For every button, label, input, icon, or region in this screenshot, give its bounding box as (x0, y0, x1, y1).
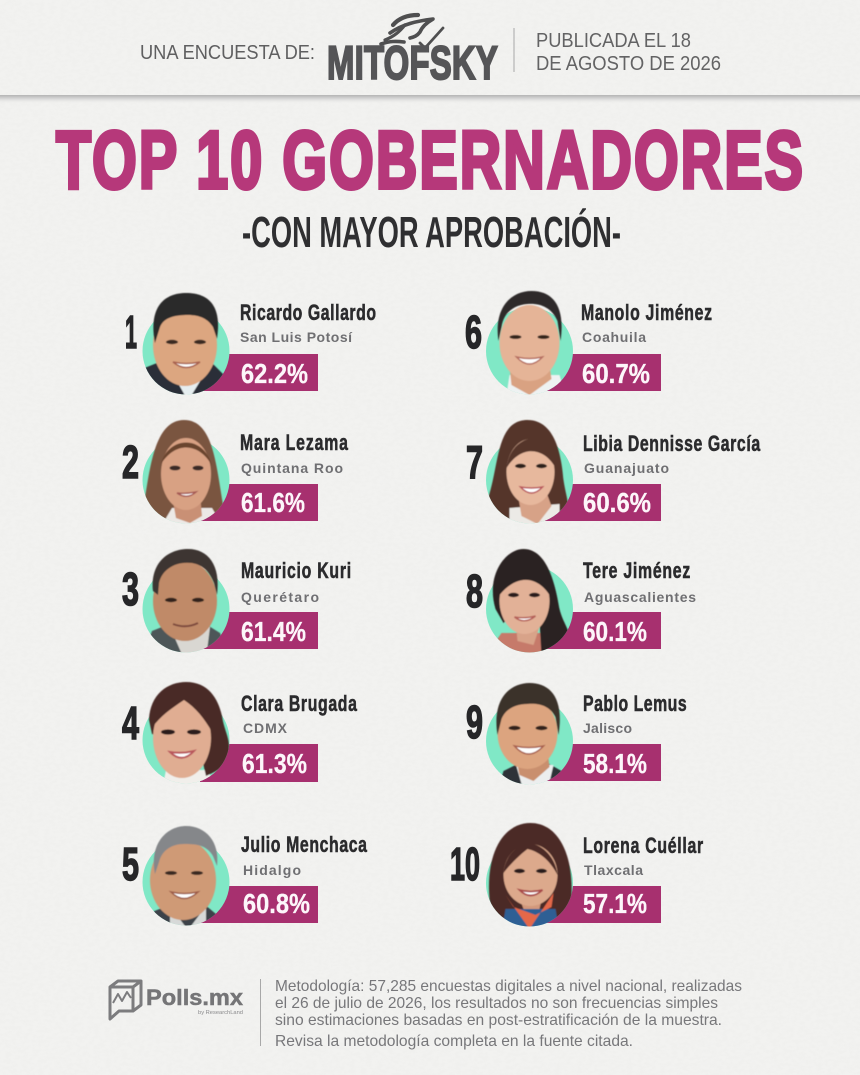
entry 9 (466, 683, 687, 791)
name: Pablo Lemus (583, 693, 687, 717)
approval: 62.2% (241, 358, 308, 389)
approval: 61.6% (241, 487, 305, 518)
icon: Mitofsky bird logo (381, 15, 443, 48)
rank: 2 (122, 436, 139, 488)
approval: 61.4% (241, 616, 306, 647)
approval: 60.7% (582, 358, 650, 389)
publication date: PUBLICADA EL 18 (536, 30, 691, 52)
state: San Luis Potosí (240, 329, 353, 345)
methodology note: el 26 de julio de 2026, los resultados no son frecuencias simples (275, 995, 718, 1012)
publication date: DE AGOSTO DE 2026 (536, 53, 721, 75)
subtitle: -CON MAYOR APROBACIÓN- (242, 207, 621, 257)
state: Aguascalientes (584, 589, 696, 605)
approval: 58.1% (583, 748, 647, 779)
entry 6 (465, 291, 712, 401)
header label: UNA ENCUESTA DE: (140, 41, 315, 64)
Research Land tagline: by ResearchLand (198, 1010, 243, 1016)
name: Julio Menchaca (241, 834, 367, 858)
state: Jalisco (583, 720, 632, 736)
entry 10 (450, 823, 704, 933)
Mitofsky wordmark: MITOFSKY (327, 36, 498, 89)
name: Libia Dennisse García (583, 433, 760, 457)
portrait: Clara Brugada (149, 682, 229, 790)
name: Mauricio Kuri (241, 560, 351, 584)
methodology note: Metodología: 57,285 encuestas digitales a nivel nacional, realizadas (275, 978, 742, 995)
Polls.mx wordmark: Polls.mx (146, 985, 244, 1010)
portrait: Libia Dennisse García (488, 420, 568, 530)
rank: 6 (465, 306, 482, 358)
name: Clara Brugada (241, 693, 357, 717)
rank: 10 (450, 838, 480, 890)
name: Manolo Jiménez (581, 302, 712, 326)
entry 3 (122, 549, 351, 659)
portrait: Mauricio Kuri (150, 548, 222, 652)
state: CDMX (243, 720, 288, 736)
state: Quintana Roo (241, 460, 343, 476)
rank: 3 (122, 563, 139, 615)
entry 8 (466, 549, 696, 659)
rank: 4 (122, 697, 139, 749)
entry 7 (466, 420, 760, 530)
state: Querétaro (241, 589, 319, 605)
approval: 60.1% (583, 616, 647, 647)
state: Guanajuato (584, 460, 669, 476)
entry 5 (122, 826, 367, 932)
approval: 60.6% (583, 487, 651, 518)
rank: 7 (466, 436, 483, 488)
state: Hidalgo (243, 862, 301, 878)
name: Tere Jiménez (583, 560, 690, 584)
state: Coahuila (582, 329, 646, 345)
rank: 9 (466, 696, 483, 748)
publication date (536, 30, 721, 75)
rank: 5 (122, 838, 139, 890)
methodology note: sino estimaciones basadas en post-estratificación de la muestra. (275, 1012, 722, 1029)
portrait: Lorena Cuéllar (489, 823, 572, 933)
name: Lorena Cuéllar (583, 835, 704, 859)
approval: 57.1% (583, 888, 647, 919)
approval: 60.8% (243, 888, 310, 919)
approval: 61.3% (242, 748, 307, 779)
methodology note (275, 978, 742, 1050)
entry 4 (122, 682, 357, 790)
portrait: Ricardo Gallardo (146, 292, 224, 394)
header band (0, 15, 860, 104)
state: Tlaxcala (584, 862, 643, 878)
methodology note: Revisa la metodología completa en la fuente citada. (275, 1033, 633, 1050)
portrait: Manolo Jiménez (496, 290, 562, 394)
name: Mara Lezama (240, 432, 348, 456)
entry 1 (125, 293, 376, 401)
portrait: Julio Menchaca (150, 825, 218, 926)
portrait: Pablo Lemus (496, 682, 562, 784)
entry 1: 1 (125, 306, 137, 358)
rank: 8 (466, 565, 483, 617)
footer (110, 978, 742, 1050)
name: Ricardo Gallardo (240, 302, 376, 326)
title: TOP 10 GOBERNADORES (56, 114, 803, 205)
portrait: Mara Lezama (144, 420, 224, 528)
icon: Polls.mx logo (110, 981, 141, 1019)
entry 2 (122, 420, 348, 528)
portrait: Tere Jiménez (492, 548, 568, 652)
